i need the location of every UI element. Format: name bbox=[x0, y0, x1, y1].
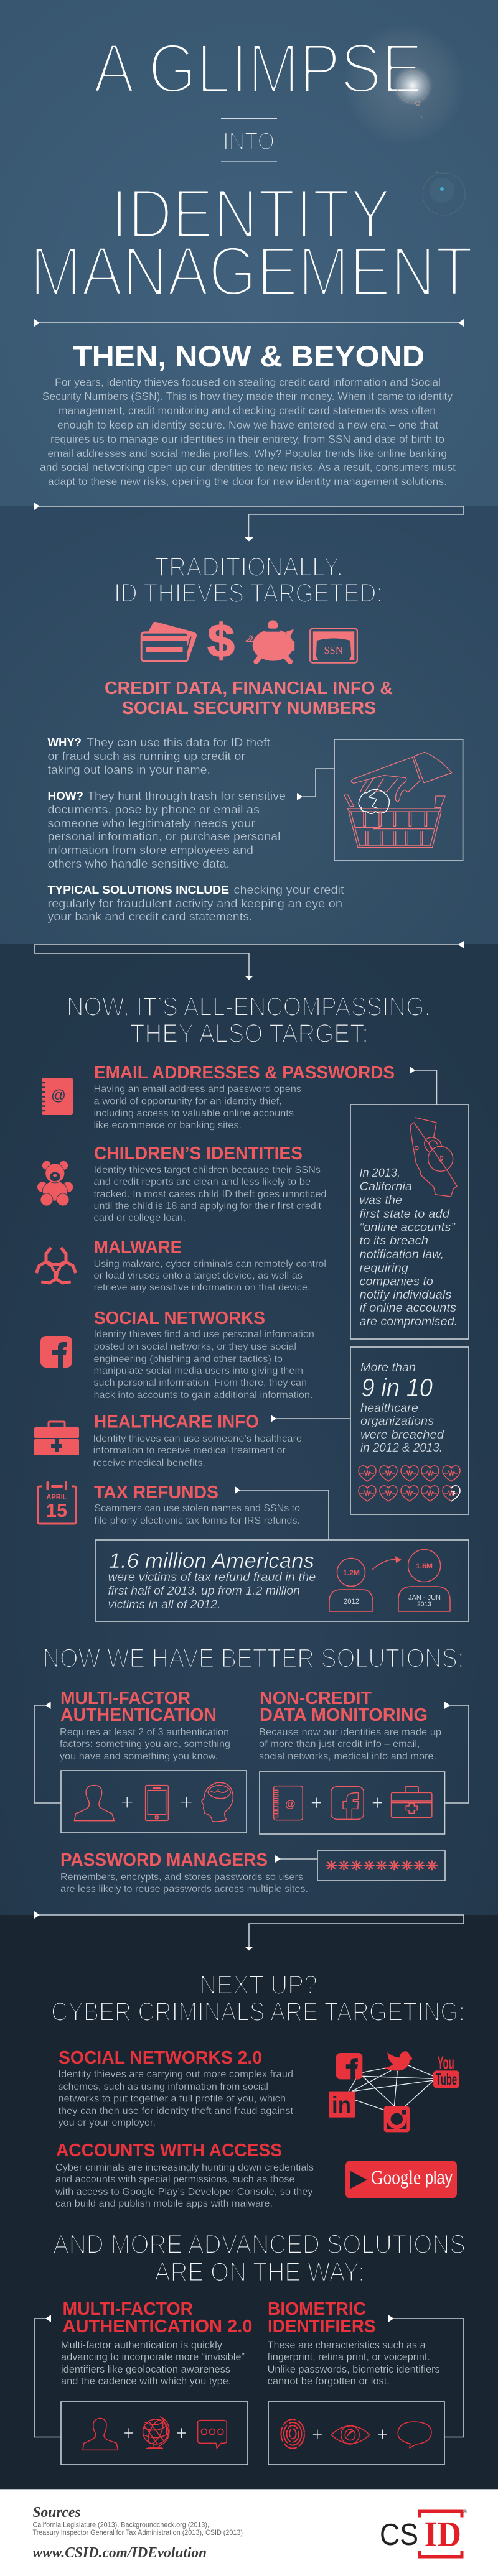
callout box: nine in ten bbox=[271, 1347, 469, 1514]
heading bbox=[60, 1689, 217, 1725]
body text: Cyber criminals are increasingly hunting down credentials bbox=[55, 2162, 314, 2173]
body text bbox=[61, 2339, 245, 2387]
body text: retrieve any sensitive information on that device. bbox=[93, 1282, 310, 1293]
heading: next up: NEXT UP? bbox=[199, 1970, 317, 2000]
callout text: healthcare bbox=[360, 1402, 418, 1415]
heading: social security numbers: SOCIAL SECURITY NUMBERS bbox=[122, 698, 376, 718]
text block: why: or fraud such as running up credit or bbox=[47, 750, 245, 762]
subtitle: then now and beyond: THEN, NOW & BEYOND bbox=[73, 340, 425, 373]
body text: Because now our identities are made up bbox=[259, 1727, 441, 1738]
heading: MULTI-FACTOR bbox=[60, 1689, 190, 1708]
solution: biometric identifiers bbox=[268, 2299, 464, 2465]
sources list bbox=[32, 2520, 243, 2537]
heading: NON-CREDIT bbox=[260, 1689, 372, 1708]
text block: typical solutions bbox=[47, 884, 344, 923]
callout text: were breached bbox=[360, 1429, 445, 1442]
icons: fingerprint eye speech bubble bbox=[281, 2419, 431, 2449]
logo: csid: ID bbox=[425, 2514, 461, 2554]
intro paragraph bbox=[40, 376, 456, 488]
panel: next up bbox=[0, 1911, 498, 2490]
heading bbox=[62, 2299, 253, 2337]
body text: Requires at least 2 of 3 authentication bbox=[60, 1727, 229, 1738]
intro paragraph: requires us to manage our identities in their entirety, from SSN and date of birth to bbox=[50, 433, 444, 445]
divider with arrow ends bbox=[34, 319, 464, 327]
solution: multi-factor authentication bbox=[34, 1689, 247, 1833]
panel: intro bbox=[0, 0, 498, 506]
icon grid: ten hearts bbox=[359, 1466, 460, 1501]
icon: april 15 calendar: APRIL bbox=[46, 1493, 67, 1501]
icon: google play badge: Google bbox=[371, 2166, 421, 2189]
panel: traditional targets bbox=[0, 503, 498, 944]
text block: how: information from store employees and bbox=[47, 844, 253, 856]
body text bbox=[60, 1727, 230, 1762]
heading: are on the way: ARE ON THE WAY: bbox=[154, 2258, 365, 2287]
heading: credit data: CREDIT DATA, FINANCIAL INFO & bbox=[105, 679, 393, 698]
body text: These are characteristics such as a bbox=[268, 2339, 426, 2351]
body text: can build and publish mobile apps with malware. bbox=[55, 2198, 273, 2209]
heading: BIOMETRIC bbox=[268, 2299, 366, 2319]
body text: file phony electronic tax forms for IRS refunds. bbox=[95, 1516, 300, 1526]
body text: Multi-factor authentication is quickly bbox=[61, 2339, 222, 2351]
body text: advancing to incorporate more “invisible” bbox=[61, 2351, 245, 2363]
callout text: to its breach bbox=[360, 1235, 428, 1248]
text block: how: someone who legitimately needs your bbox=[47, 817, 255, 830]
url: www.CSID.com/IDEvolution bbox=[32, 2545, 207, 2561]
body text: schemes, such as using information from social bbox=[58, 2082, 268, 2092]
heading: DATA MONITORING bbox=[260, 1705, 428, 1725]
item: social networks bbox=[40, 1309, 314, 1401]
intro paragraph: Security Numbers (SSN). This is how they made their money. When it came to identity bbox=[42, 390, 453, 402]
icon: address book bbox=[41, 1078, 73, 1115]
callout text bbox=[360, 1167, 458, 1328]
panel: footer bbox=[0, 2489, 498, 2576]
heading: CHILDREN’S IDENTITIES bbox=[94, 1144, 303, 1164]
body text: tracked. In most cases child ID theft goes unnoticed bbox=[93, 1189, 326, 1200]
callout text: More than bbox=[360, 1361, 416, 1374]
rule above into bbox=[221, 118, 277, 119]
heading: MULTI-FACTOR bbox=[62, 2299, 193, 2319]
body text: networks to put together a full profile of you, which bbox=[58, 2093, 286, 2105]
body text: and credit reports are clean and less likely to be bbox=[93, 1177, 311, 1187]
body text: Identity thieves find and use personal information bbox=[93, 1329, 314, 1340]
body text: they can then use for identity theft and fraud against bbox=[58, 2106, 294, 2116]
body text bbox=[259, 1727, 441, 1762]
masked password asterisks: ❋❋❋❋❋❋❋❋❋ bbox=[325, 1858, 438, 1873]
callout box: trash basket bbox=[297, 739, 463, 861]
body text: Scammers can use stolen names and SSNs to bbox=[95, 1503, 300, 1514]
icon: google play badge bbox=[345, 2161, 457, 2198]
callout text: “online accounts” bbox=[360, 1221, 456, 1234]
item: childrens identities bbox=[37, 1144, 326, 1223]
callout text: victims in all of 2012. bbox=[108, 1598, 220, 1611]
body text: a world of opportunity for an identity thief, bbox=[93, 1096, 282, 1107]
icon: ssn card: SSN bbox=[324, 644, 342, 656]
heading: PASSWORD MANAGERS bbox=[60, 1850, 268, 1870]
icon: social network graph: in bbox=[332, 2092, 351, 2118]
logo: csid: CS bbox=[380, 2518, 418, 2552]
icon: dollar sign: $ bbox=[207, 614, 235, 667]
text block: how: HOW? bbox=[47, 790, 83, 802]
callout text: companies to bbox=[360, 1275, 433, 1289]
item: email addresses bbox=[41, 1063, 395, 1131]
text block: how: They hunt through trash for sensitive bbox=[87, 790, 286, 802]
icon: medical kit bbox=[34, 1422, 79, 1455]
body text: information to receive medical treatment or bbox=[93, 1445, 286, 1456]
item: malware bbox=[34, 1238, 326, 1293]
text block: how: documents, pose by phone or email as bbox=[47, 804, 260, 816]
heading: SOCIAL NETWORKS 2.0 bbox=[59, 2048, 262, 2068]
item: healthcare info bbox=[34, 1412, 302, 1468]
icon: california with padlock bbox=[410, 1118, 457, 1197]
body text: until the child is 18 and applying for their first credit bbox=[93, 1201, 322, 1212]
heading: they also target: THEY ALSO TARGET: bbox=[130, 1019, 369, 1049]
body text: Remembers, encrypts, and stores passwords so users bbox=[60, 1872, 303, 1883]
heading: traditionally: TRADITIONALLY, bbox=[154, 552, 343, 582]
icon: social network graph bbox=[329, 2051, 459, 2132]
item: tax refunds bbox=[37, 1483, 300, 1526]
icons: person globe speech bubble bbox=[83, 2417, 387, 2450]
body text bbox=[93, 1084, 301, 1131]
icon: social network graph: You bbox=[438, 2054, 454, 2073]
intro paragraph: enough to keep an identity secure. Now we have entered a new era – one that bbox=[57, 419, 438, 431]
body text: such personal information. From there, they can bbox=[93, 1378, 307, 1388]
text block: typical solutions: your bank and credit card statements. bbox=[47, 910, 253, 923]
icon: ssn card bbox=[310, 629, 357, 663]
title: Identity: IDENTITY bbox=[111, 174, 391, 253]
callout text: 9 in 10 bbox=[361, 1373, 433, 1402]
body text bbox=[58, 2069, 294, 2128]
callout text: in 2012 & 2013. bbox=[360, 1442, 443, 1455]
callout text: requiring bbox=[360, 1262, 408, 1275]
text block: why: They can use this data for ID theft bbox=[87, 736, 270, 749]
heading: AUTHENTICATION 2.0 bbox=[62, 2317, 253, 2337]
text block: typical solutions: checking your credit bbox=[234, 884, 344, 896]
chart: victims 2012 vs 2013: JAN - JUN bbox=[408, 1594, 441, 1601]
arrow connector into section bbox=[34, 1911, 464, 1950]
body text: manipulate social media users into giving them bbox=[93, 1366, 303, 1376]
body text bbox=[93, 1434, 302, 1468]
body text: Identity thieves target children because their SSNs bbox=[93, 1165, 321, 1175]
icon: address book: @ bbox=[51, 1087, 66, 1104]
icon row bbox=[141, 614, 357, 667]
callout box: california law bbox=[350, 1067, 469, 1339]
chart: victims 2012 vs 2013: 2013 bbox=[417, 1601, 431, 1608]
body text: engineering (phishing and other tactics) to bbox=[93, 1354, 283, 1364]
chart: victims 2012 vs 2013: 2012 bbox=[344, 1597, 359, 1606]
callout text: are compromised. bbox=[360, 1315, 458, 1328]
text block: how: personal information, or purchase personal bbox=[47, 830, 280, 843]
callout text: was the bbox=[360, 1194, 402, 1207]
title: into: INTO bbox=[223, 128, 275, 155]
icon: social network graph: Tube bbox=[436, 2070, 457, 2088]
body text: fingerprint, retina print, or voiceprint. bbox=[268, 2351, 430, 2363]
body text: you have and something you know. bbox=[60, 1751, 218, 1762]
intro paragraph: email addresses and social media profiles. Why? Popular trends like online banking bbox=[47, 447, 447, 460]
body text: posted on social networks, or they use social bbox=[93, 1341, 296, 1352]
sources list: California Legislature (2013), Backgroundcheck.org (2013), bbox=[32, 2520, 209, 2529]
body text: with access to Google Play’s Developer Console, so they bbox=[55, 2187, 313, 2197]
arrow connector into section bbox=[34, 941, 464, 980]
heading: SOCIAL NETWORKS bbox=[94, 1309, 265, 1328]
solution: non-credit data monitoring bbox=[259, 1689, 469, 1834]
heading: ACCOUNTS WITH ACCESS bbox=[56, 2141, 282, 2161]
intro paragraph: adapt to these new risks, opening the door for new identity management solutions. bbox=[48, 475, 447, 488]
text block: why: taking out loans in your name. bbox=[47, 764, 210, 776]
callout text: first half of 2013, up from 1.2 million bbox=[108, 1585, 300, 1598]
heading: id thieves targeted: ID THIEVES TARGETED: bbox=[114, 578, 383, 608]
heading: HEALTHCARE INFO bbox=[94, 1412, 259, 1432]
body text: Unlike passwords, biometric identifiers bbox=[268, 2363, 440, 2375]
panel: now all-encompassing bbox=[0, 941, 498, 1915]
body text: Identity thieves are carrying out more complex fraud bbox=[58, 2069, 293, 2080]
icon: facebook bbox=[40, 1336, 72, 1368]
body text: cannot be forgotten or lost. bbox=[268, 2375, 390, 2387]
body text: of more than just credit info – email, bbox=[259, 1739, 420, 1749]
title: A Glimpse: A GLIMPSE bbox=[93, 29, 423, 108]
icon: piggy bank bbox=[246, 620, 294, 662]
callout box: 1.6 million americans bbox=[95, 1486, 469, 1621]
heading: now all-encompassing: NOW, IT’S ALL-ENCOMPASSING. bbox=[67, 992, 431, 1022]
icons: address book facebook medical kit bbox=[274, 1786, 432, 1820]
body text bbox=[60, 1872, 308, 1894]
heading: IDENTIFIERS bbox=[268, 2317, 376, 2337]
heading bbox=[268, 2299, 376, 2337]
body text: hack into accounts to gain additional information. bbox=[93, 1390, 312, 1401]
lens flare bbox=[344, 23, 466, 215]
icon: credit cards bbox=[141, 622, 197, 662]
sources list: Treasury Inspector General for Tax Administration (2013), CSID (2013) bbox=[32, 2528, 243, 2537]
body text bbox=[95, 1503, 300, 1526]
icon: google play badge: play bbox=[425, 2168, 453, 2189]
icon: hand reaching into trash basket bbox=[344, 752, 452, 848]
body text: including access to valuable online accounts bbox=[93, 1108, 294, 1119]
text block: typical solutions: TYPICAL SOLUTIONS INCLUDE bbox=[47, 884, 229, 896]
icons: person phone brain bbox=[74, 1782, 233, 1822]
body text: like ecommerce or banking sites. bbox=[93, 1120, 242, 1131]
text block: typical solutions: regularly for fraudulent activity and keeping an eye on bbox=[47, 897, 342, 910]
rule below into bbox=[221, 161, 277, 162]
callout text bbox=[360, 1361, 445, 1455]
heading: AUTHENTICATION bbox=[60, 1705, 217, 1725]
body text: Identity thieves can use someone’s healthcare bbox=[93, 1434, 302, 1444]
body text: and the cadence with which you type. bbox=[61, 2375, 232, 2387]
intro paragraph: and social networking open up our identities to new risks. As a result, consumers must bbox=[40, 461, 456, 473]
callout text: notify individuals bbox=[360, 1289, 452, 1302]
body text: you or your employer. bbox=[58, 2118, 156, 2128]
chart: victims 2012 vs 2013: 1.6M bbox=[416, 1563, 433, 1570]
chart: victims 2012 vs 2013: 1.2M bbox=[343, 1570, 360, 1577]
sources heading: Sources bbox=[32, 2504, 81, 2521]
logo: csid: ® bbox=[463, 2509, 467, 2514]
body text: social networks, medical info and more. bbox=[259, 1751, 436, 1762]
text block: why: WHY? bbox=[47, 736, 82, 749]
callout text: first state to add bbox=[360, 1208, 451, 1221]
body text bbox=[268, 2339, 440, 2387]
heading: TAX REFUNDS bbox=[94, 1483, 218, 1503]
icon: april 15 calendar bbox=[37, 1483, 76, 1524]
body text: receive medical benefits. bbox=[93, 1458, 205, 1468]
logo: csid bbox=[380, 2509, 467, 2557]
item: social networks 2.0 bbox=[58, 2048, 459, 2132]
chart: victims 2012 vs 2013 bbox=[329, 1550, 450, 1611]
icons: address book facebook medical kit: @ bbox=[285, 1798, 296, 1810]
body text bbox=[55, 2162, 314, 2209]
intro paragraph: For years, identity thieves focused on stealing credit card information and Social bbox=[55, 376, 441, 388]
heading: MALWARE bbox=[94, 1238, 182, 1258]
callout text: organizations bbox=[360, 1415, 435, 1428]
callout text: 1.6 million Americans bbox=[108, 1549, 314, 1573]
icon: biohazard bbox=[34, 1248, 78, 1286]
callout text: if online accounts bbox=[360, 1302, 457, 1315]
body text bbox=[93, 1329, 314, 1401]
heading: EMAIL ADDRESSES & PASSWORDS bbox=[94, 1063, 395, 1083]
body text: identifiers like geolocation awareness bbox=[61, 2363, 230, 2375]
body text bbox=[93, 1165, 326, 1223]
body text: and accounts with special permissions, such as those bbox=[55, 2174, 295, 2185]
callout text: In 2013, bbox=[360, 1167, 400, 1180]
body text: are less likely to reuse passwords across multiple sites. bbox=[60, 1884, 308, 1894]
solution: multi-factor authentication 2.0 bbox=[34, 2299, 387, 2465]
arrow connector into section bbox=[34, 503, 464, 541]
solution: password managers bbox=[60, 1850, 445, 1894]
callout text: California bbox=[360, 1180, 412, 1193]
icon: teddy bear bbox=[37, 1161, 73, 1206]
body text: factors: something you are, something bbox=[60, 1739, 230, 1749]
text block: why bbox=[47, 736, 270, 776]
callout text: were victims of tax refund fraud in the bbox=[108, 1571, 316, 1584]
body text: or load viruses onto a target device, as well as bbox=[93, 1271, 303, 1281]
intro paragraph: management, credit monitoring and checking credit card statements was often bbox=[59, 404, 436, 417]
body text: Using malware, cyber criminals can remotely control bbox=[93, 1259, 326, 1269]
text block: how bbox=[47, 790, 286, 870]
body text: card or college loan. bbox=[93, 1213, 186, 1223]
callout text bbox=[108, 1549, 316, 1611]
text block: how: others who handle sensitive data. bbox=[47, 858, 230, 870]
heading bbox=[260, 1689, 428, 1725]
item: accounts with access bbox=[55, 2141, 457, 2209]
icon: april 15 calendar: 15 bbox=[46, 1499, 67, 1521]
callout text: notification law, bbox=[360, 1248, 444, 1261]
body text bbox=[93, 1259, 326, 1293]
body text: Having an email address and password opens bbox=[93, 1084, 301, 1095]
